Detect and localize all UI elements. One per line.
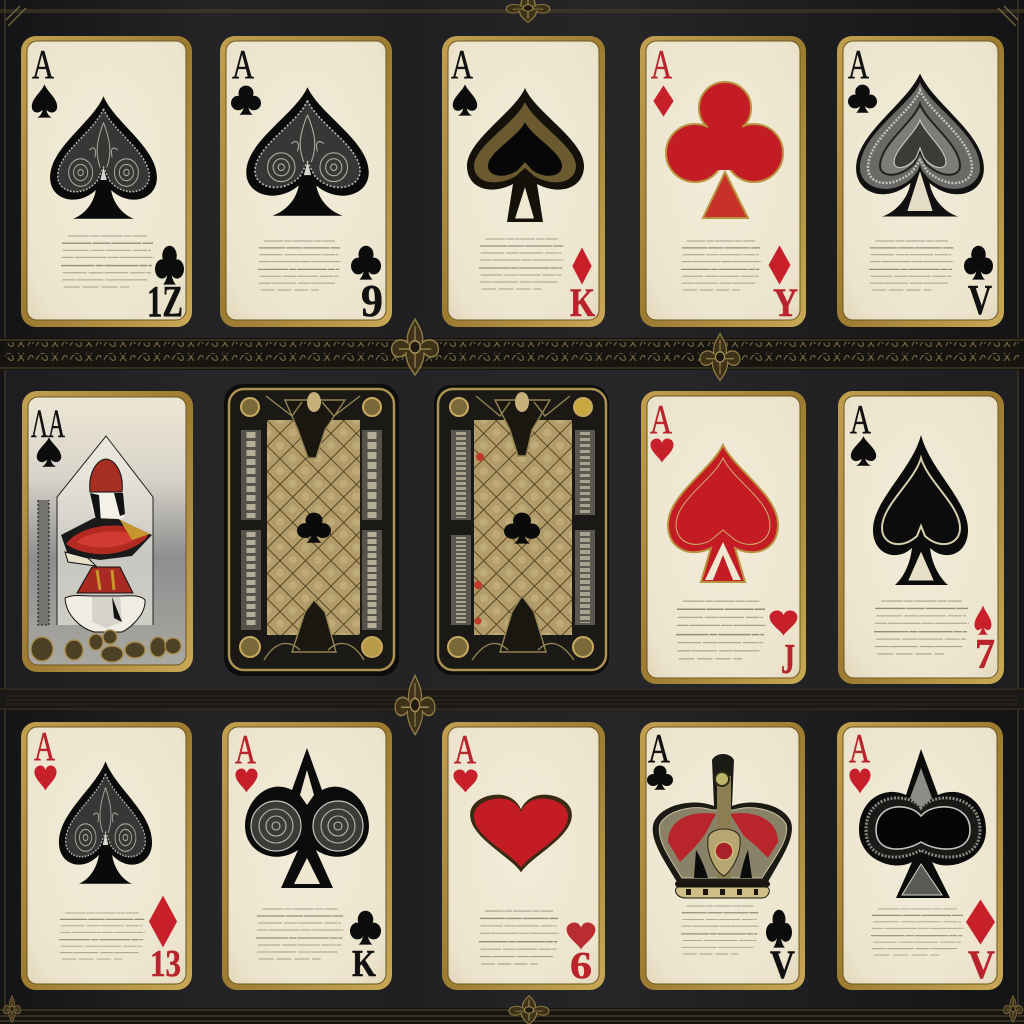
card: ace of clubs, top row 2 <box>220 36 392 327</box>
top filigree <box>472 396 574 660</box>
middle row background <box>6 370 1018 688</box>
side strips <box>251 430 372 630</box>
side strips <box>461 430 585 625</box>
corner suit <box>975 605 991 635</box>
top shell <box>515 392 529 412</box>
large ornate spade <box>50 96 157 219</box>
corner suit <box>770 611 797 635</box>
figure <box>61 459 152 632</box>
ornament: lower band fleur <box>395 675 435 735</box>
corner rank: 13 <box>150 943 181 985</box>
text block <box>681 241 761 290</box>
text block <box>256 909 344 959</box>
index rank: A <box>848 41 869 87</box>
card: ace of spades, top row 3 <box>442 36 605 327</box>
index rank: A <box>849 725 870 771</box>
text block <box>676 601 766 659</box>
card: black spade, middle row 5 <box>838 391 1004 684</box>
figure outline <box>57 436 153 625</box>
corner medallions <box>448 398 593 657</box>
text block <box>258 241 341 290</box>
card back 1 <box>224 384 399 676</box>
index rank: A <box>34 723 55 769</box>
corner suit <box>149 896 177 947</box>
ornament: bottom centre <box>509 996 549 1024</box>
corner rank: Y <box>773 280 798 325</box>
corner suit <box>567 923 595 949</box>
text block <box>59 913 145 959</box>
centre club <box>504 513 540 544</box>
corner medallions <box>240 398 382 657</box>
corner rank: K <box>352 943 376 985</box>
lattice panel <box>474 420 572 635</box>
card: red heart, bottom row 3 <box>442 722 605 990</box>
index suit <box>653 85 674 117</box>
index suit <box>454 769 478 793</box>
top filigree <box>264 396 364 660</box>
corner suit <box>966 899 995 945</box>
corner rank: 9 <box>361 275 383 326</box>
index suit <box>453 84 477 116</box>
corner rank: J <box>781 637 795 683</box>
large black spade <box>873 435 968 585</box>
index suit <box>32 84 57 118</box>
corner rank: 7 <box>975 632 995 678</box>
text block <box>871 909 964 955</box>
crown <box>653 754 792 898</box>
centre club <box>297 513 331 543</box>
index rank: A <box>648 725 670 771</box>
card: ornate club spade, bottom row 2 <box>222 722 392 990</box>
large heart <box>470 795 572 872</box>
card: jack figure, middle row 1 <box>22 391 193 672</box>
index suit <box>231 86 261 115</box>
text block <box>681 906 759 954</box>
large red spade <box>668 445 778 582</box>
index suit <box>851 436 876 466</box>
ornament: top centre <box>506 0 550 22</box>
card: red spade, middle row 4 <box>641 391 806 684</box>
index suit <box>848 85 877 113</box>
corner rank: V <box>770 942 795 987</box>
index rank: A <box>235 726 256 772</box>
ornament: bottom left corner <box>3 996 21 1022</box>
card: silver spade, top row 5 <box>837 36 1004 327</box>
index rank: A <box>451 41 473 87</box>
text block <box>869 241 954 290</box>
corner suit <box>768 245 790 285</box>
corner suit <box>766 910 792 948</box>
red flower accents <box>474 453 484 624</box>
card: ornate spade, bottom row 1 <box>21 722 192 990</box>
ornament: band right fleur <box>700 334 740 380</box>
corner rank: V <box>968 278 992 324</box>
large spade <box>859 749 986 898</box>
ornament: band left fleur <box>392 319 438 375</box>
index rank: A <box>232 41 254 87</box>
ornament: bottom right corner <box>1003 996 1023 1022</box>
corner suit <box>964 246 993 280</box>
side strip <box>38 500 49 625</box>
lattice panel <box>267 420 360 635</box>
corner suit <box>155 246 184 285</box>
card: crown, bottom row 4 <box>640 722 805 990</box>
large ornate spade <box>59 761 152 884</box>
corner rank: 6 <box>570 945 592 987</box>
index rank: A <box>651 41 672 87</box>
index suit <box>37 437 61 467</box>
corner suit <box>572 247 592 285</box>
card: double-lobe spade, bottom row 5 <box>837 722 1003 990</box>
ornamental band: upper <box>0 338 1024 370</box>
corner suit <box>350 911 381 945</box>
large gold-edged spade <box>467 88 584 222</box>
index suit <box>235 768 258 792</box>
gold coins <box>31 630 181 662</box>
text block <box>874 601 969 654</box>
corner rank: V <box>968 942 995 987</box>
index rank: A <box>850 396 871 442</box>
text block <box>479 911 559 964</box>
ornamental band: lower <box>0 688 1024 710</box>
index suit <box>849 769 871 793</box>
card: ace of spades, top row 1 <box>21 36 192 327</box>
card back 2 <box>434 385 609 675</box>
large engraved spade <box>856 73 984 217</box>
text block <box>61 236 154 287</box>
large ornate club spade <box>245 748 369 888</box>
corner rank: 1Z <box>147 277 183 326</box>
index rank: A <box>32 41 54 87</box>
corner rank: K <box>570 280 595 325</box>
index rank: A <box>454 726 476 772</box>
index rank: ΛA <box>31 401 65 446</box>
index suit <box>650 438 674 462</box>
index rank: A <box>650 396 672 442</box>
corner suit <box>351 246 381 280</box>
top shell <box>307 392 321 412</box>
index suit <box>34 766 57 790</box>
text block <box>479 239 564 289</box>
card: red club, top row 4 <box>640 36 806 327</box>
large red club <box>666 82 783 218</box>
large ornate spade <box>246 87 369 216</box>
index suit <box>647 766 673 790</box>
